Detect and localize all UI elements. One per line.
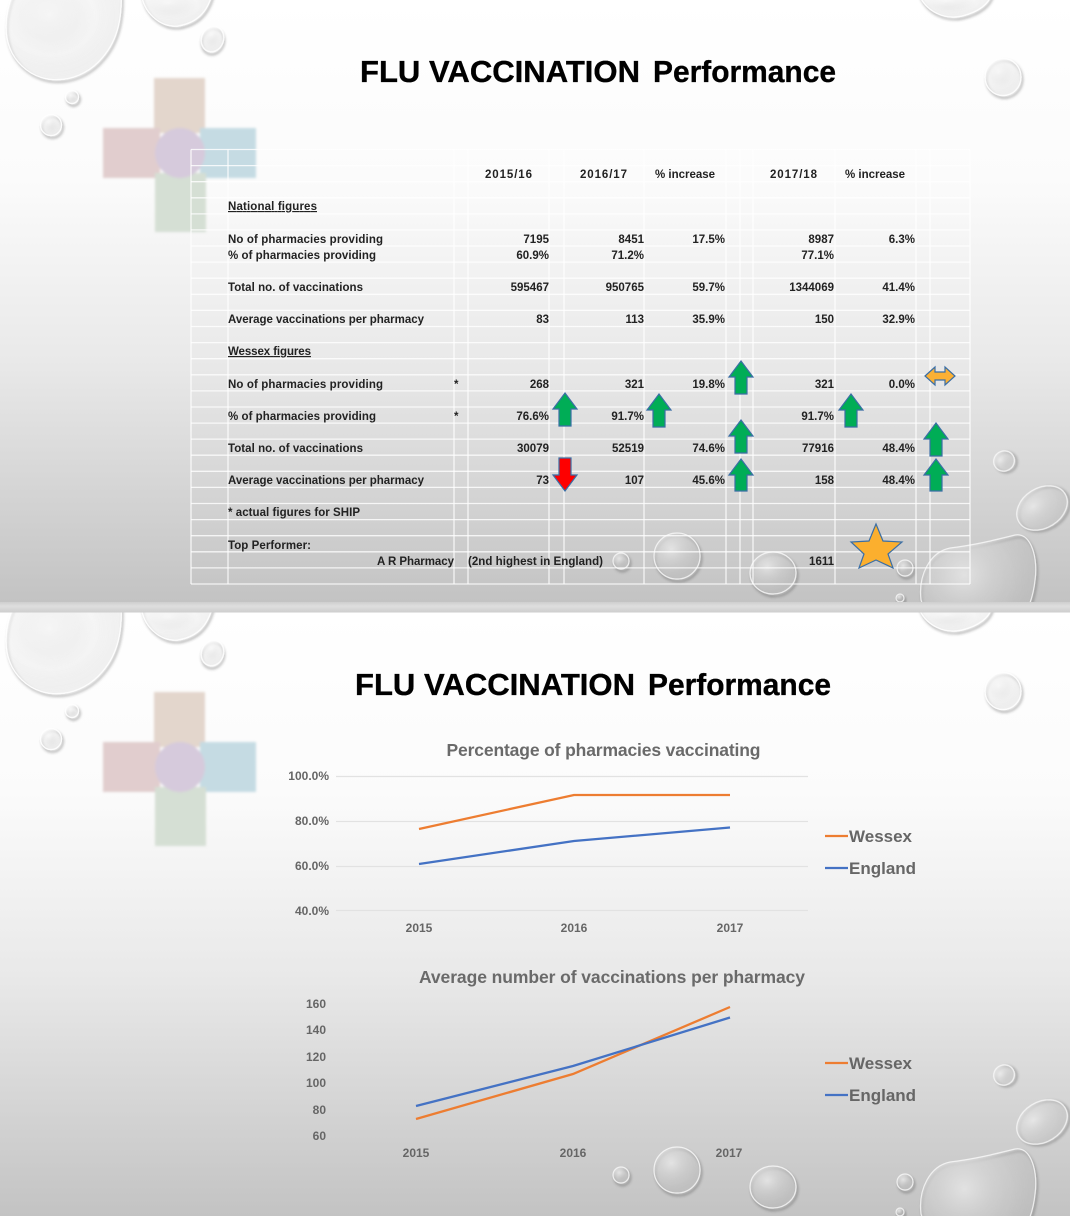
row: wessex percent of pharmacies: 91.7% — [801, 411, 834, 423]
row: national total vaccinations — [228, 282, 915, 294]
row: wessex total vaccinations — [228, 443, 915, 455]
section heading: national figures: National figures — [228, 201, 317, 213]
column headers: 2016/17 — [580, 169, 627, 181]
row: national average: 83 — [536, 314, 549, 326]
row: wessex total vaccinations: 30079 — [517, 443, 549, 455]
cross logo — [103, 78, 256, 232]
footnote: * actual figures for SHIP — [228, 507, 360, 519]
row: national number of pharmacies — [228, 234, 915, 246]
x axis labels — [406, 921, 744, 935]
chart title: Percentage of pharmacies vaccinating — [446, 740, 760, 760]
x axis labels: 2016 — [561, 921, 588, 935]
line: Wessex — [416, 1007, 730, 1119]
y axis labels: 40.0% — [295, 904, 329, 918]
section heading: wessex figures: Wessex figures — [228, 346, 311, 358]
legend: England — [849, 1086, 916, 1105]
top performer: Top Performer: — [228, 540, 311, 552]
line: Wessex — [419, 795, 730, 829]
row: wessex percent of pharmacies — [228, 411, 834, 423]
y axis labels: 80 — [313, 1103, 326, 1117]
x axis labels: 2017 — [717, 921, 744, 935]
slide 2 — [0, 612, 1070, 1216]
row: national total vaccinations: 41.4% — [882, 282, 915, 294]
icon: up arrows — [553, 361, 948, 491]
top performer: A R Pharmacy — [377, 556, 455, 568]
y axis labels: 80.0% — [295, 814, 329, 828]
row: wessex total vaccinations: 77916 — [802, 443, 834, 455]
top performer — [228, 540, 835, 568]
table text — [228, 169, 915, 568]
row: national percent of pharmacies: 77.1% — [801, 250, 834, 262]
row: wessex number of pharmacies: 321 — [815, 379, 835, 391]
row: national percent of pharmacies: % of pharmacies providing — [228, 250, 376, 262]
row: national total vaccinations: 1344069 — [789, 282, 834, 294]
row: national average: 32.9% — [882, 314, 915, 326]
y axis labels — [306, 997, 326, 1143]
column headers: % increase — [845, 169, 905, 181]
row: wessex number of pharmacies — [228, 379, 915, 391]
row: wessex total vaccinations: 48.4% — [882, 443, 915, 455]
icon: star — [851, 524, 902, 568]
row: wessex total vaccinations: 74.6% — [692, 443, 725, 455]
legend: England — [849, 859, 916, 878]
row: wessex number of pharmacies: 19.8% — [692, 379, 725, 391]
title — [360, 54, 836, 89]
chart: average number of vaccinations per pharmacy — [306, 967, 916, 1160]
row: national percent of pharmacies: 60.9% — [516, 250, 549, 262]
water drops background — [6, 0, 1070, 650]
x axis labels: 2015 — [403, 1146, 430, 1160]
line: England — [416, 1018, 730, 1106]
row: wessex percent of pharmacies: % of pharmacies providing — [228, 411, 376, 423]
row: wessex number of pharmacies: No of pharmacies providing — [228, 379, 383, 391]
x axis labels: 2016 — [560, 1146, 587, 1160]
legend: Wessex — [849, 1054, 913, 1073]
row: wessex percent of pharmacies: 76.6% — [516, 411, 549, 423]
y axis labels: 140 — [306, 1023, 326, 1037]
water drops background — [6, 594, 1070, 1216]
y axis labels: 100.0% — [288, 769, 329, 783]
chart: percentage of pharmacies vaccinating — [288, 740, 916, 935]
row: wessex total vaccinations: 52519 — [612, 443, 644, 455]
row: national average: Average vaccinations per pharmacy — [228, 314, 425, 326]
y axis labels: 60 — [313, 1129, 326, 1143]
x axis labels: 2015 — [406, 921, 433, 935]
title: Performance — [653, 54, 836, 89]
title: FLU VACCINATION — [360, 54, 640, 89]
legend — [825, 1054, 916, 1105]
row: wessex average: 48.4% — [882, 475, 915, 487]
row: wessex average — [228, 475, 915, 487]
row: wessex number of pharmacies: 268 — [530, 379, 550, 391]
table grid — [191, 150, 970, 584]
row: national average — [228, 314, 915, 326]
legend — [825, 827, 916, 878]
line: England — [419, 828, 730, 864]
row: wessex percent of pharmacies: 91.7% — [611, 411, 644, 423]
row: national percent of pharmacies — [228, 250, 834, 262]
row: wessex average: 73 — [536, 475, 549, 487]
row: wessex total vaccinations: Total no. of vaccinations — [228, 443, 363, 455]
row: national average: 113 — [625, 314, 644, 326]
x axis labels — [403, 1146, 743, 1160]
x axis labels: 2017 — [716, 1146, 743, 1160]
row: wessex number of pharmacies: 321 — [625, 379, 645, 391]
legend: Wessex — [849, 827, 913, 846]
row: wessex average: Average vaccinations per pharmacy — [228, 475, 425, 487]
column headers: 2017/18 — [770, 169, 818, 181]
row: national percent of pharmacies: 71.2% — [611, 250, 644, 262]
title: Performance — [648, 667, 831, 702]
row: wessex average: 107 — [625, 475, 644, 487]
y axis labels: 100 — [306, 1076, 326, 1090]
y axis labels: 120 — [306, 1050, 326, 1064]
row: national number of pharmacies: No of pharmacies providing — [228, 234, 383, 246]
y axis labels: 60.0% — [295, 859, 329, 873]
row: national number of pharmacies: 7195 — [523, 234, 550, 246]
top performer: 1611 — [809, 556, 835, 568]
icon: orange double arrow — [925, 367, 955, 385]
y axis labels — [288, 769, 329, 918]
row: national number of pharmacies: 6.3% — [889, 234, 915, 246]
row: national number of pharmacies: 8451 — [618, 234, 645, 246]
column headers: 2015/16 — [485, 169, 532, 181]
row: national average: 150 — [815, 314, 834, 326]
row: wessex number of pharmacies: * — [454, 379, 459, 391]
title — [355, 667, 831, 702]
row: national total vaccinations: 595467 — [511, 282, 549, 294]
title: FLU VACCINATION — [355, 667, 635, 702]
top performer: (2nd highest in England) — [468, 556, 603, 568]
row: national total vaccinations: Total no. of vaccinations — [228, 282, 363, 294]
row: national total vaccinations: 59.7% — [692, 282, 725, 294]
row: national total vaccinations: 950765 — [606, 282, 645, 294]
icon: red down arrow — [553, 458, 577, 491]
slide 1 — [0, 0, 1070, 602]
row: wessex average: 158 — [815, 475, 835, 487]
cross logo — [103, 692, 256, 846]
column headers: % increase — [655, 169, 715, 181]
row: wessex average: 45.6% — [692, 475, 725, 487]
row: national average: 35.9% — [692, 314, 725, 326]
y axis labels: 160 — [306, 997, 326, 1011]
slide divider band — [0, 602, 1070, 612]
row: national number of pharmacies: 8987 — [808, 234, 834, 246]
chart title: Average number of vaccinations per pharmacy — [419, 967, 805, 987]
column headers — [485, 169, 905, 181]
row: wessex number of pharmacies: 0.0% — [889, 379, 915, 391]
row: wessex percent of pharmacies: * — [454, 411, 459, 423]
row: national number of pharmacies: 17.5% — [692, 234, 725, 246]
